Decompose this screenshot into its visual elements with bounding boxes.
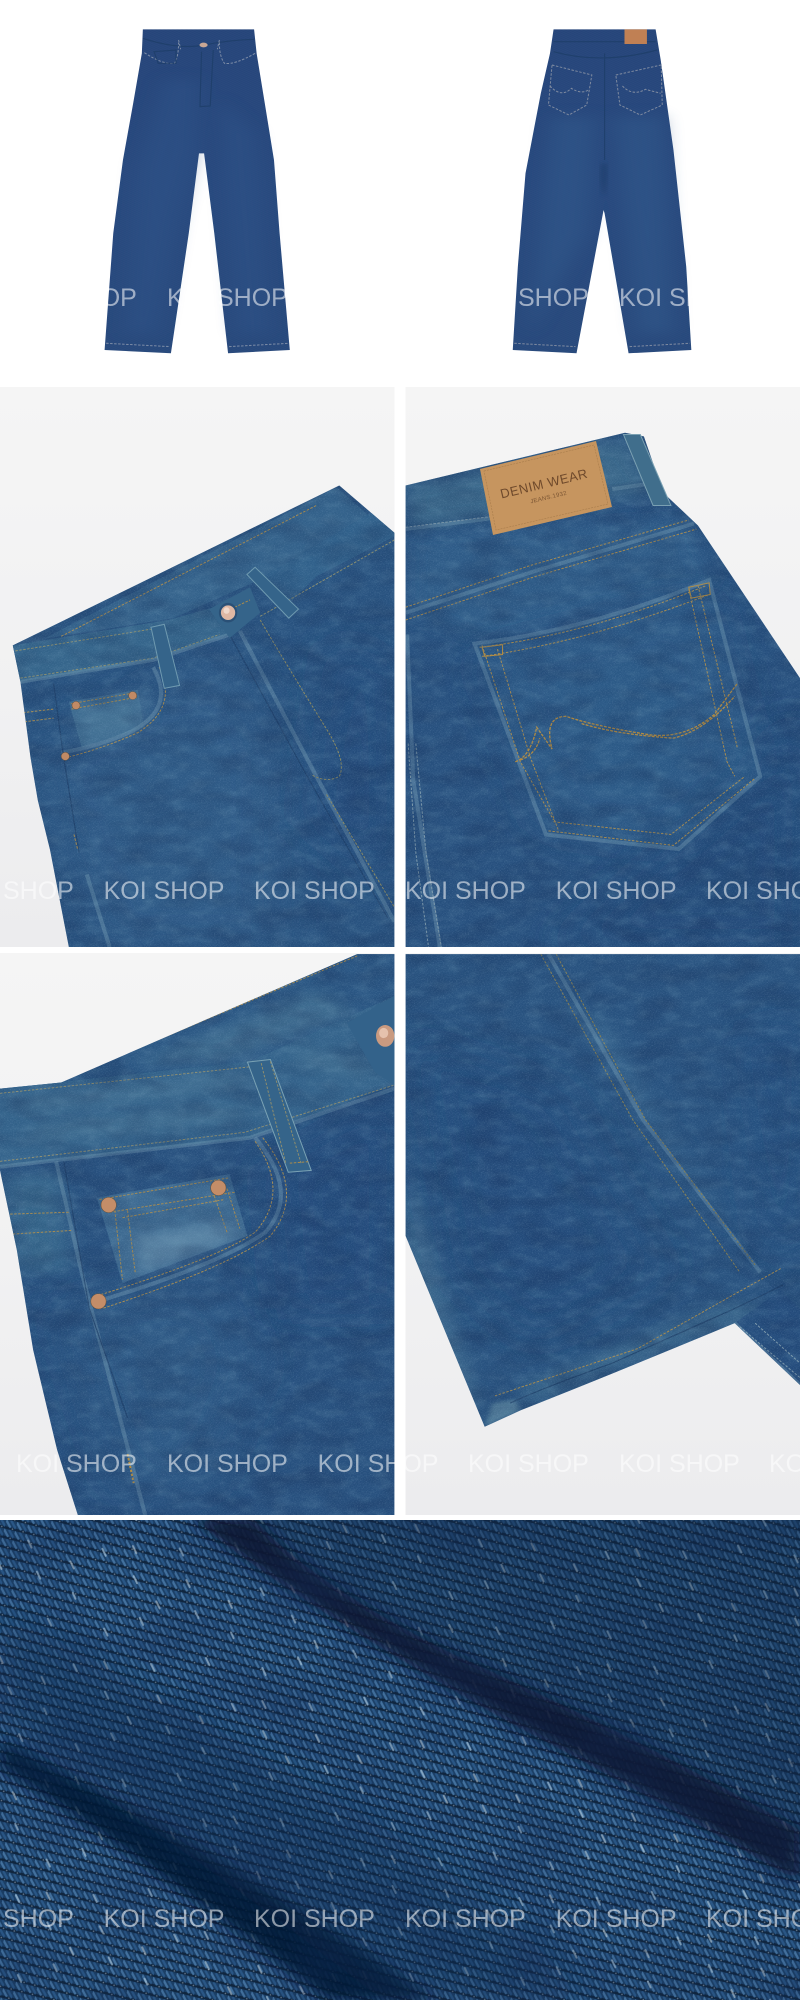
wash shading [403,431,800,951]
watermark row 1 [16,284,800,312]
belt loop [623,435,671,505]
watermark row 1: KOI SHOP [619,284,740,312]
panel: back pocket and leather label [403,387,800,951]
rivets [91,1180,226,1309]
watermark row 4: KOI SHOP [556,1905,677,1933]
fly [240,631,394,922]
denim body [0,954,394,1516]
denim texture [403,431,800,951]
denim texture [0,952,398,1519]
side seam [407,635,440,947]
leather label: JEANS.1932 [530,491,568,505]
front waistband [13,607,240,682]
panel: denim fabric texture close-up [0,1520,800,2000]
watermark row 4: KOI SHOP [254,1905,375,1933]
belt loops [151,624,180,688]
denim legs [406,954,800,1427]
watermark row 2: KOI SHOP [405,877,526,905]
panel: front waist detail [0,387,398,951]
watermark row 3 [16,1450,800,1478]
watermark row 2: KOI SHOP [556,877,677,905]
watermark row 1: KOI SHOP [468,284,589,312]
watermark row 4: KOI SHOP [405,1905,526,1933]
denim body [406,433,800,947]
watermark row 1: KOI SHOP [16,284,137,312]
waistband line [406,482,663,529]
watermark row 2: KOI SHOP [254,877,375,905]
panel: leg hem close-up [403,952,800,1515]
watermark row 3: KOI SHOP [167,1450,288,1478]
jeans: front view [105,29,290,353]
watermark row 2 [0,877,800,905]
pocket squiggle [515,684,737,762]
jeans: back view [513,29,691,353]
waistband [0,996,394,1167]
watermark row 3: KOI SHOP [468,1450,589,1478]
wash shading [0,482,398,951]
leather label: DENIM WEAR [499,466,589,501]
watermark row 2: KOI SHOP [104,877,224,905]
watermark row 3: KOI SHOP [318,1450,438,1478]
pocket [474,580,760,849]
watermark row 4 [0,1905,800,1933]
hem [495,1269,781,1396]
leather label [480,441,612,535]
watermark row 3: KOI SHOP [619,1450,740,1478]
back waistband inside [43,487,367,639]
fabric mottling [0,1520,800,2000]
yoke stitching [406,524,694,613]
back waist patch [624,29,647,44]
watermark row 4: KOI SHOP [104,1905,224,1933]
watermark row 1: KOI SHOP [318,284,438,312]
pocket curve [92,1138,281,1303]
panel: full jeans front and back [105,29,691,353]
wash shading [403,952,800,1432]
coin pocket [97,1174,247,1283]
denim texture [0,482,398,951]
watermark row 3: KOI SHOP [16,1450,137,1478]
panel: front pocket close-up [0,952,398,1519]
rivet button [199,43,208,47]
front pocket [69,690,144,747]
side seam [548,954,760,1272]
button [347,996,394,1085]
wash shading [0,952,398,1519]
button [219,603,237,623]
rivets [61,692,137,760]
watermark row 1: KOI SHOP [167,284,288,312]
denim texture [403,952,800,1432]
belt loop [247,1060,311,1172]
denim body [13,485,394,947]
side seam [56,1161,145,1516]
back waistband inside [120,954,394,1058]
button tab [209,587,260,638]
fold shading [0,1520,800,2000]
